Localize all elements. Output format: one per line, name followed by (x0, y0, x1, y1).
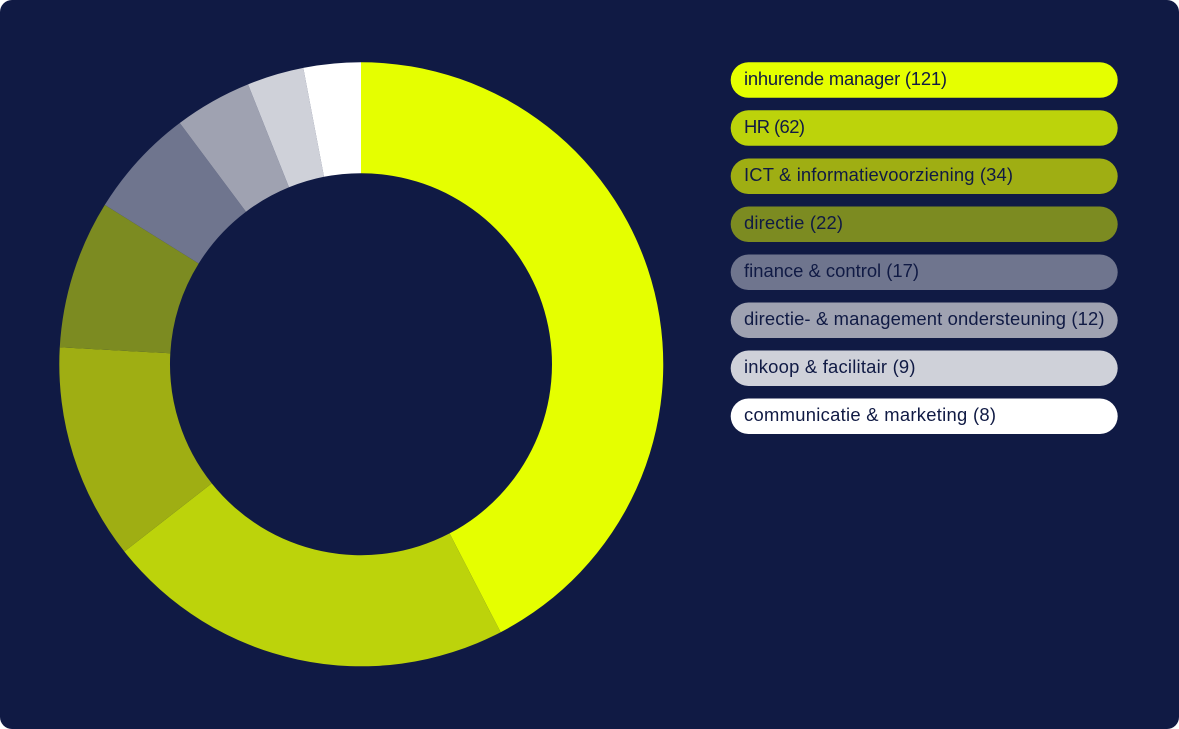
legend item: communicatie & marketing (731, 398, 1118, 434)
segment: finance & control (17) (105, 123, 246, 264)
legend item: directie- & management ondersteuning (731, 302, 1118, 338)
legend item: directie: directie (22) (744, 212, 843, 233)
legend item: inkoop & facilitair: inkoop & facilitair (9) (744, 356, 916, 377)
legend item: directie (731, 206, 1118, 242)
legend item: inhurende manager (731, 62, 1118, 98)
legend item: HR: HR (62) (744, 116, 805, 137)
legend item: finance & control (731, 254, 1118, 290)
legend item: ICT & informatievoorziening (731, 158, 1118, 194)
legend item: inkoop & facilitair (731, 350, 1118, 386)
donut chart (59, 62, 663, 666)
legend (731, 62, 1118, 434)
segment: communicatie & marketing (8) (303, 62, 361, 177)
legend item: ICT & informatievoorziening: ICT & informatievoorziening (34) (744, 164, 1013, 185)
legend item: finance & control: finance & control (17) (744, 260, 919, 281)
segment: directie (22) (60, 205, 199, 353)
segment: inhurende manager (121) (361, 62, 663, 632)
segment: ICT & informatievoorziening (34) (59, 347, 212, 552)
segment: HR (62) (124, 483, 501, 666)
legend item: communicatie & marketing: communicatie & marketing (8) (744, 404, 996, 425)
legend item: inhurende manager: inhurende manager (121) (744, 68, 947, 89)
segment: inkoop & facilitair (9) (248, 68, 324, 187)
legend item: HR (731, 110, 1118, 146)
legend item: directie- & management ondersteuning: directie- & management ondersteuning (12) (744, 308, 1104, 329)
segment: directie- & management ondersteuning (12) (180, 84, 289, 212)
